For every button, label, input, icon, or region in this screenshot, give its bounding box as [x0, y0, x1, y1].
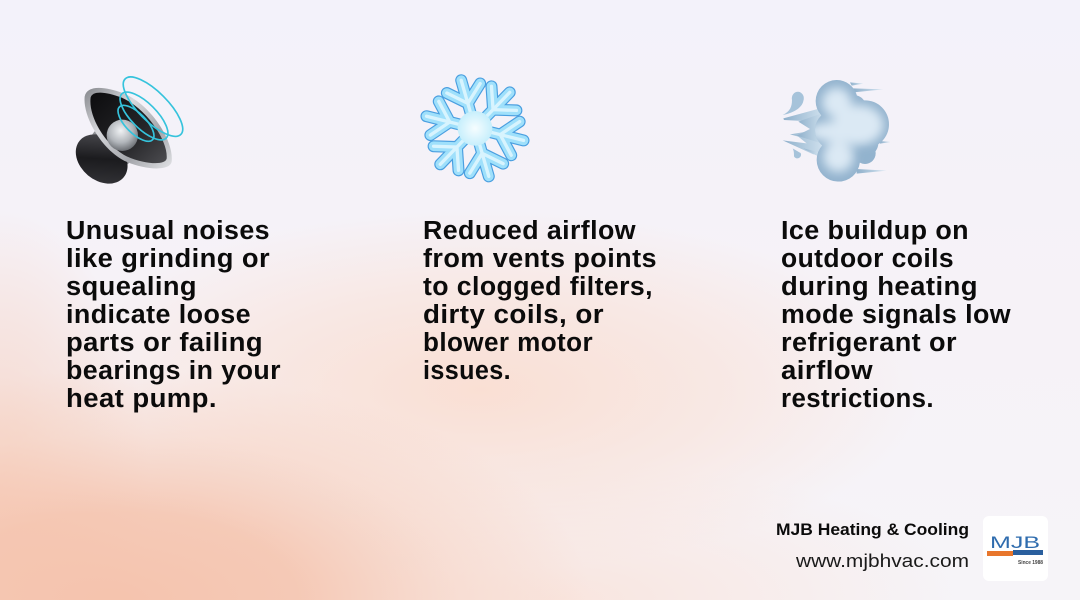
text: unusual noises: like grinding or [66, 245, 270, 273]
icon: speaker [66, 68, 191, 194]
speaker dome [107, 120, 138, 151]
speaker cone [90, 93, 167, 163]
icon: wind puff [783, 80, 890, 182]
text: ice buildup: restrictions. [781, 385, 934, 413]
logo blue bar [1013, 550, 1043, 555]
icon: snowflake [422, 75, 528, 181]
text: reduced airflow: dirty coils, or [423, 301, 604, 329]
text: unusual noises: parts or failing [66, 329, 263, 357]
text: reduced airflow: from vents points [423, 245, 657, 273]
speaker neck [81, 117, 142, 178]
company name: MJB Heating & Cooling [776, 520, 969, 539]
logo [983, 516, 1048, 581]
puff droplets [783, 92, 804, 115]
puff streaks [783, 82, 891, 174]
text: unusual noises: heat pump. [66, 385, 217, 413]
text: ice buildup: outdoor coils [781, 245, 954, 273]
text: reduced airflow: to clogged filters, [423, 273, 653, 301]
logo tagline: Since 1988 [1018, 560, 1043, 566]
text: reduced airflow: Reduced airflow [423, 217, 636, 245]
text: ice buildup: mode signals low [781, 301, 1011, 329]
speaker magnet [66, 124, 137, 194]
text: reduced airflow: blower motor [423, 329, 593, 357]
text: unusual noises: squealing [66, 273, 197, 301]
text: ice buildup: Ice buildup on [781, 217, 969, 245]
puff cloud [815, 80, 889, 182]
logo tile [983, 516, 1048, 581]
text: ice buildup [781, 217, 1011, 413]
text: unusual noises [66, 217, 281, 413]
text: reduced airflow: issues. [423, 357, 511, 385]
text: unusual noises: indicate loose [66, 301, 251, 329]
logo letters: MJB [990, 533, 1040, 552]
text: reduced airflow [423, 217, 657, 385]
text: unusual noises: bearings in your [66, 357, 281, 385]
sound waves [112, 68, 191, 147]
logo orange bar [987, 551, 1013, 556]
website: www.mjbhvac.com [795, 551, 969, 571]
text: unusual noises: Unusual noises [66, 217, 270, 245]
text: ice buildup: airflow [781, 357, 873, 385]
text: ice buildup: during heating [781, 273, 978, 301]
speaker rim [85, 88, 172, 168]
text: ice buildup: refrigerant or [781, 329, 957, 357]
